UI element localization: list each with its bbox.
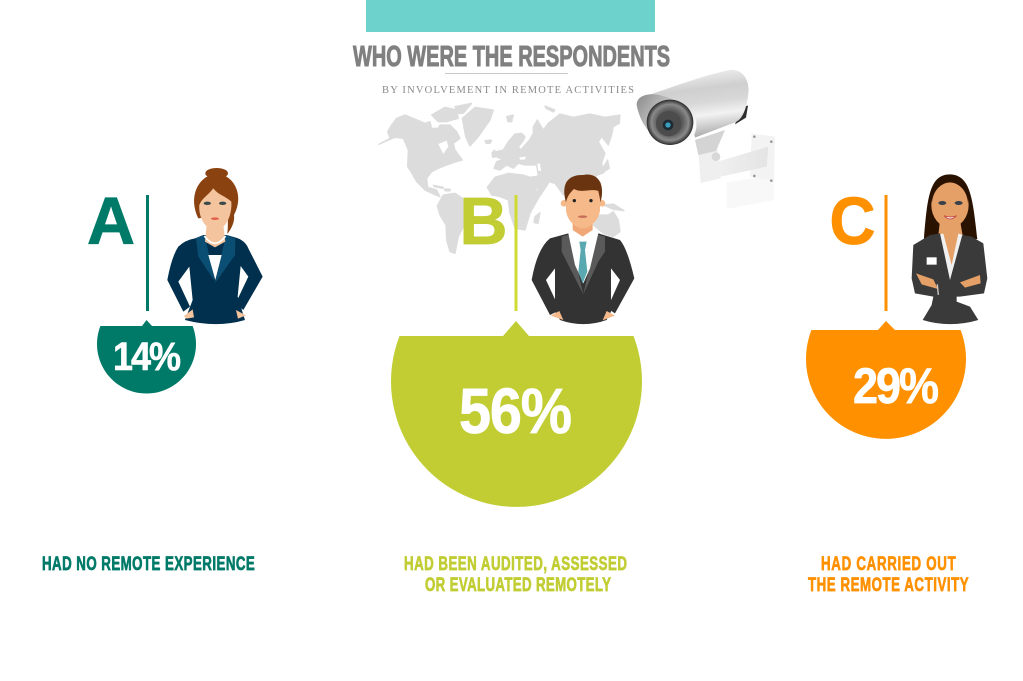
percent badge C — [806, 321, 966, 439]
label B: HAD BEEN AUDITED, ASSESSED — [404, 554, 627, 575]
percent badge B — [391, 321, 642, 507]
world map — [379, 103, 624, 253]
icon: security camera — [637, 70, 775, 209]
label B: OR EVALUATED REMOTELY — [425, 575, 611, 596]
letter B: B — [460, 184, 508, 259]
value 14%: 14% — [113, 335, 181, 379]
title: WHO WERE THE RESPONDENTS — [353, 42, 670, 73]
icon: businessman in grey suit — [532, 175, 634, 324]
letter A: A — [87, 184, 135, 259]
top teal banner — [366, 0, 655, 32]
panel: B audited remotely — [391, 175, 642, 596]
icon: businesswoman with crossed arms — [912, 174, 987, 324]
value 56%: 56% — [459, 375, 572, 447]
panel: C carried out remote activity — [806, 174, 987, 596]
percent badge A — [97, 320, 196, 394]
letter C: C — [830, 184, 876, 259]
label C: HAD CARRIED OUT — [821, 554, 956, 575]
label C: THE REMOTE ACTIVITY — [808, 575, 969, 596]
label B — [404, 554, 627, 596]
label A: HAD NO REMOTE EXPERIENCE — [42, 554, 255, 575]
subtitle: BY INVOLVEMENT IN REMOTE ACTIVITIES — [382, 85, 634, 96]
value 29%: 29% — [853, 359, 939, 415]
icon: businesswoman in navy — [167, 168, 263, 324]
panel: A no remote experience — [42, 168, 263, 575]
label C — [808, 554, 969, 596]
